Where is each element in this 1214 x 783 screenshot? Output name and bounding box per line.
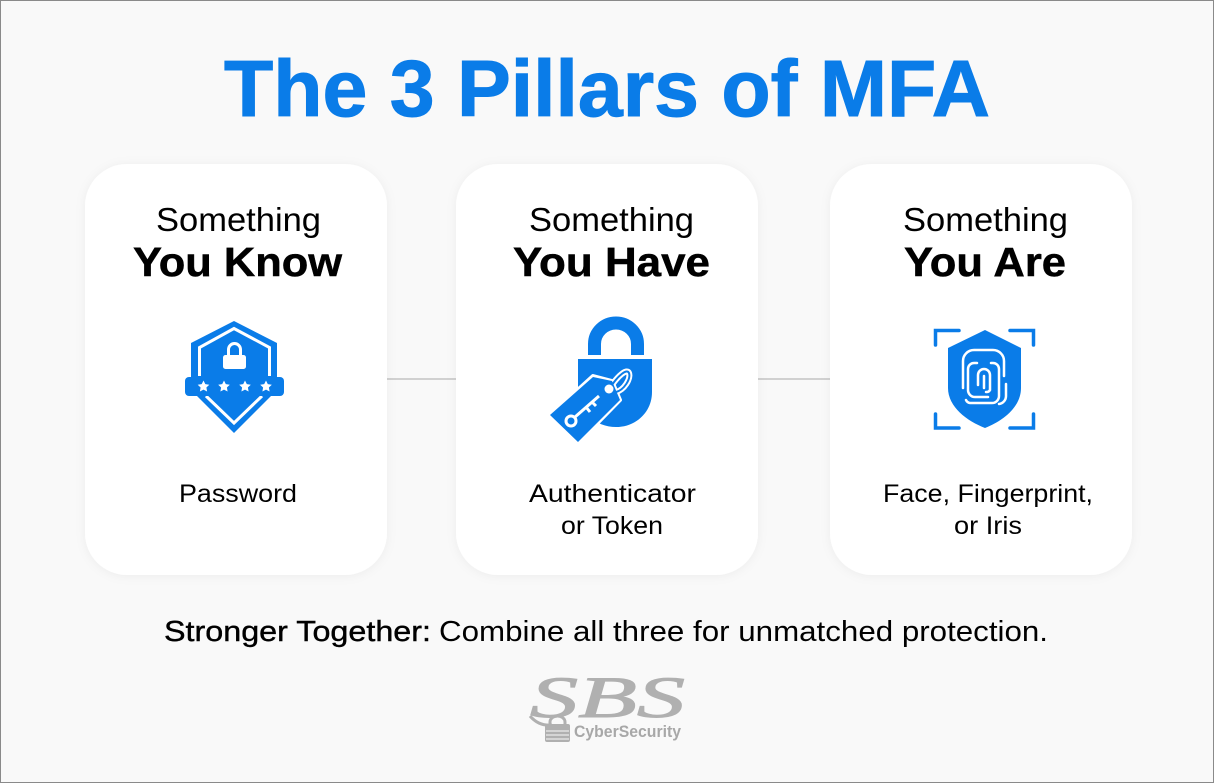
heading: something you have: You Have [513, 239, 710, 285]
icon: padlock with key tag [550, 323, 652, 443]
heading: something you have: Something [529, 201, 694, 238]
panel: something you are [830, 164, 1132, 575]
heading: something you know [133, 201, 342, 285]
label: face, fingerprint, or iris [883, 480, 1093, 540]
heading: something you have [513, 201, 710, 285]
tagline: Combine all three for unmatched protection. [439, 616, 1048, 648]
logo: SBS CyberSecurity [530, 665, 685, 742]
icon: shield with password [185, 321, 284, 433]
label: password: Password [179, 480, 297, 508]
label: authenticator or token: Authenticator [529, 480, 696, 508]
label: face, fingerprint, or iris: Face, Fingerprint, [883, 480, 1093, 508]
heading: something you are [903, 201, 1068, 285]
heading: something you are: Something [903, 201, 1068, 238]
label: authenticator or token: or Token [561, 512, 663, 540]
title: The 3 Pillars of MFA [224, 44, 990, 133]
logo: SBS CyberSecurity: CyberSecurity [574, 723, 682, 741]
panel: something you know [85, 164, 387, 575]
heading: something you are: You Are [904, 239, 1066, 285]
logo: SBS CyberSecurity: SBS [530, 665, 685, 730]
label: authenticator or token [529, 480, 696, 540]
heading: something you know: Something [156, 201, 321, 238]
tagline: Stronger Together: [164, 616, 431, 648]
tagline [164, 616, 1048, 648]
heading: something you know: You Know [133, 239, 342, 285]
label: face, fingerprint, or iris: or Iris [954, 512, 1022, 540]
icon: fingerprint shield with scan frame [936, 330, 1034, 428]
panel: something you have [456, 164, 758, 575]
